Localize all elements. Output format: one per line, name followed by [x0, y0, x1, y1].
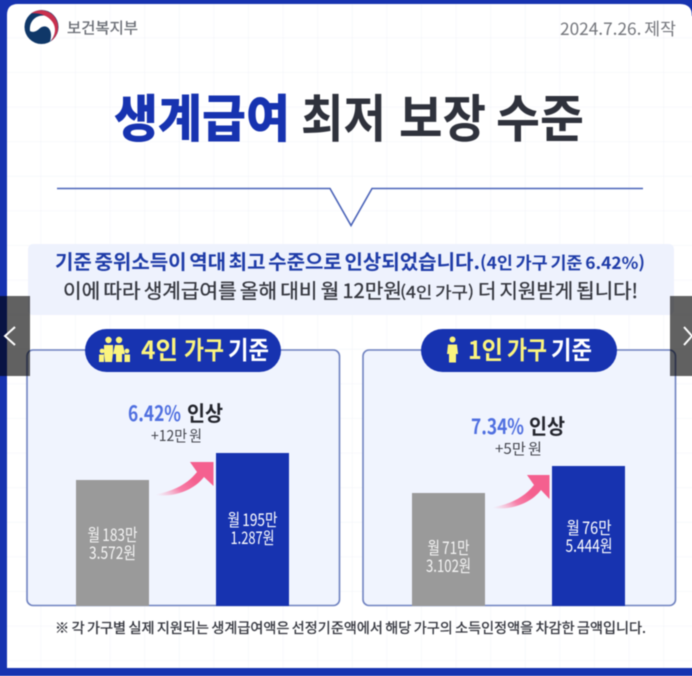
title: 최저: [301, 78, 386, 152]
ministry name: 보건복지부: [67, 17, 138, 38]
pill heading: 기준: [551, 331, 592, 367]
increase rate: 7.34%: [471, 411, 524, 441]
bar: before: 3.102원: [426, 552, 471, 577]
bar: before: 월 71만: [428, 534, 470, 559]
icon: government logo: [24, 10, 58, 44]
bar: after: [216, 453, 289, 606]
summary band: [28, 244, 674, 315]
panel: 4-person household: [27, 329, 340, 606]
panel: 1-person household: [363, 329, 676, 606]
pill heading: 가구: [507, 331, 547, 367]
pill heading: [421, 329, 617, 372]
summary line 2: (4인 가구): [400, 279, 474, 303]
title: 생계급여: [114, 78, 290, 152]
pill heading: 가구: [184, 331, 224, 367]
bar: after: [552, 466, 625, 606]
bar: after: 1.287원: [230, 524, 274, 549]
bar: before: [76, 480, 149, 606]
icon: person: [447, 336, 458, 362]
title: [114, 78, 584, 152]
bar: before: 월 183만: [88, 521, 138, 546]
bar: after: 월 195만: [228, 506, 278, 531]
footnote: ※ 각 가구별 실제 지원되는 생계급여액은 선정기준액에서 해당 가구의 소득인정액을 차감한 금액입니다.: [55, 618, 646, 638]
title: 보장: [399, 78, 486, 152]
summary line 2: 이에 따라 생계급여를 올해 대비 월 12만원: [63, 275, 402, 304]
summary line 1: 기준 중위소득이 역대 최고 수준으로 인상되었습니다.: [55, 246, 480, 275]
increase rate: [471, 411, 565, 441]
icon: family: [99, 337, 130, 362]
arrow: [490, 475, 550, 509]
increase rate: [128, 398, 223, 428]
increase amount: +12만 원: [151, 425, 202, 446]
production date: 2024.7.26. 제작: [560, 15, 676, 40]
title: 수준: [496, 78, 584, 152]
bar: before: 3.572원: [89, 539, 136, 564]
summary line 2: 더 지원받게 됩니다!: [478, 275, 638, 304]
pill heading: 1인: [468, 331, 503, 367]
summary line 2: [63, 275, 638, 304]
increase rate: 인상: [529, 411, 565, 441]
title divider with pointer: [57, 188, 643, 226]
carousel button: next: [670, 296, 692, 376]
carousel button: previous: [0, 296, 30, 376]
increase rate: 6.42%: [128, 398, 181, 428]
pill heading: 4인: [141, 331, 178, 367]
summary line 1: (4인 가구 기준 6.42%): [480, 249, 645, 274]
arrow: [153, 462, 214, 496]
increase amount: +5만 원: [495, 438, 542, 459]
bar: before: [412, 493, 485, 606]
bar: after: 5.444원: [566, 532, 612, 557]
pill heading: [85, 329, 281, 372]
increase rate: 인상: [187, 398, 223, 428]
pill heading: 기준: [228, 331, 269, 367]
bar: after: 월 76만: [566, 514, 612, 539]
